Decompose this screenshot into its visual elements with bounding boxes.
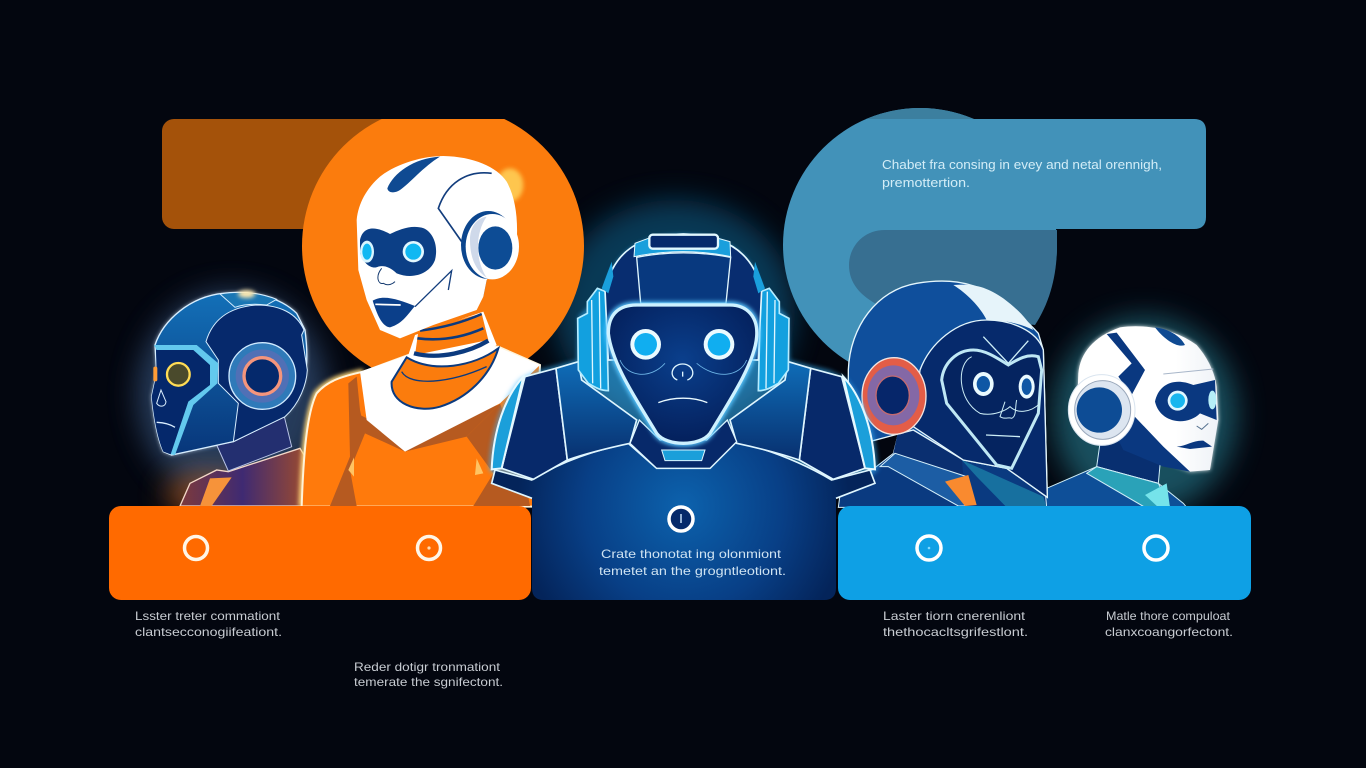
robot: left helmet figure: [152, 290, 307, 506]
helmet side strip right: [753, 262, 765, 293]
scarf inner line: [402, 367, 487, 381]
marker: orange right: [418, 536, 440, 560]
headphone shell: [578, 288, 608, 391]
head flare: [497, 168, 523, 202]
head band: [1107, 333, 1145, 395]
ear outer: [862, 358, 926, 434]
ear salmon ring: [244, 358, 281, 394]
marker: navy centre: [669, 507, 693, 531]
text: caption 2: Reder dotigr tronmationt: [354, 660, 501, 674]
helmet cyan top: [634, 238, 731, 257]
left iris: [362, 244, 372, 260]
left brown panel: [330, 377, 365, 506]
panel: blue base: [838, 506, 1251, 600]
robot: far-right white figure: [1043, 326, 1218, 507]
neck: [1097, 430, 1160, 483]
mouth: [658, 398, 707, 403]
headphone ribs: [766, 292, 775, 388]
teal shoulder: [962, 460, 1047, 507]
darker cap of the blue circle: [866, 108, 974, 119]
right headphone: [758, 288, 789, 391]
ear shade: [470, 217, 487, 278]
teal collar: [1087, 467, 1170, 507]
glow outline: [152, 292, 307, 455]
forehead mark: [387, 157, 440, 192]
text: caption 1: Lsster treter commationt: [135, 609, 281, 623]
neck base: [408, 312, 497, 365]
panel: brown top-left bar: [162, 119, 432, 229]
orange circle backdrop: [302, 119, 584, 368]
right eye: [403, 241, 424, 262]
near eye: [1168, 391, 1188, 411]
face glow: [608, 305, 757, 443]
shoulder cyan strip: [492, 377, 523, 469]
left headphone: [578, 288, 608, 391]
mouth: [373, 298, 415, 327]
chest accent right: [475, 458, 483, 475]
face: [152, 350, 210, 454]
inner darker shape of the blue backdrop: [849, 230, 1057, 325]
shoulder mid plate: [556, 362, 637, 460]
jaw line: [415, 271, 452, 307]
mouth: [1177, 441, 1212, 449]
mouth: [157, 422, 175, 427]
face: [608, 305, 757, 443]
collar band: [880, 453, 967, 506]
lip line: [375, 302, 401, 307]
text: caption 2: [354, 660, 503, 689]
light flare: [238, 290, 255, 298]
panel: blue callout bar: [866, 119, 1206, 229]
forehead mark: [1155, 327, 1185, 346]
robot: centre figure: [488, 234, 878, 600]
far eye: [153, 367, 157, 381]
neck orange: [415, 313, 488, 355]
chest accents: [348, 457, 354, 477]
ear purple: [867, 365, 919, 425]
near eye: [973, 372, 994, 396]
body: [838, 433, 1047, 507]
body glow: [302, 372, 363, 507]
orange neck scarf: [392, 348, 498, 409]
marker: blue left: [917, 536, 941, 560]
cheek lines: [620, 360, 747, 374]
body: [180, 448, 305, 506]
text: caption 2: temerate the sgnifectont.: [354, 675, 503, 689]
ear backing: [461, 211, 516, 279]
text: caption 1: [135, 609, 282, 639]
far iris: [1022, 378, 1032, 395]
brow line: [1163, 369, 1213, 374]
ear inner line: [1075, 381, 1131, 439]
robot: orange figure head: [357, 156, 523, 338]
left eye: [360, 241, 374, 263]
neck stripes: [414, 314, 488, 356]
text: premottertion.: [882, 176, 970, 190]
white highlight: [953, 285, 1033, 330]
headphone ribs: [592, 292, 601, 388]
side plate: [206, 305, 307, 442]
eye socket: [961, 357, 1040, 414]
near iris: [1170, 393, 1185, 408]
chest highlight: [1145, 483, 1170, 507]
helmet slot: [649, 235, 718, 249]
upper brown band: [357, 405, 498, 452]
text: caption 3: [883, 609, 1028, 639]
ear white: [466, 214, 519, 279]
shoulder dark plate: [502, 368, 567, 479]
lower head dark: [1113, 413, 1190, 472]
neck: [893, 427, 963, 477]
text: caption 1: clantsecconogiifeationt.: [135, 625, 282, 639]
torso: [302, 347, 540, 507]
neck cyan piece: [662, 450, 705, 461]
shoulder mid plate: [730, 362, 811, 460]
helmet side strip left: [602, 262, 613, 293]
shoulder dark plate: [799, 368, 865, 479]
nose: [157, 390, 166, 406]
left eye: [630, 329, 661, 360]
torso outline: [492, 442, 875, 498]
panel: orange base: [109, 506, 531, 600]
nose: [1000, 400, 1017, 418]
head: [1077, 326, 1218, 472]
face: [942, 350, 1042, 468]
neck collar: [630, 420, 737, 468]
eye: [167, 363, 190, 386]
background glows: [137, 200, 1237, 517]
collar highlight: [200, 477, 232, 506]
right iris: [708, 333, 730, 356]
ear ring: [1068, 375, 1135, 445]
text: caption 4: Matle thore compuloat: [1106, 609, 1231, 623]
text: navy panel: [599, 547, 786, 578]
panel: navy base: [492, 442, 875, 600]
text: navy panel: temetet an the grogntleotiont.: [599, 564, 786, 578]
right shoulder: [730, 362, 875, 479]
right iris: [405, 244, 421, 260]
eye mask: [1155, 380, 1217, 421]
white collar: [360, 347, 540, 452]
near iris: [977, 376, 990, 392]
text: caption 3: Laster tiorn cnerenliont: [883, 609, 1026, 623]
body: [1043, 467, 1187, 507]
text: navy panel: Crate thonotat ing olonmiont: [601, 547, 782, 561]
marker: orange left: [184, 536, 208, 560]
figure glow: [488, 234, 878, 480]
top highlight: [220, 292, 277, 307]
brow lines: [983, 337, 1028, 363]
neck dark: [467, 275, 487, 307]
helmet centre panel: [637, 253, 731, 303]
ear inner: [236, 349, 289, 403]
ear ring: [229, 343, 296, 409]
helmet: [152, 292, 307, 455]
robot: orange figure body: [302, 312, 540, 507]
text: caption 3: thethocacltsgrifestlont.: [883, 625, 1028, 639]
orange accent: [945, 475, 977, 506]
headphone shell: [758, 288, 789, 391]
right eye: [704, 329, 734, 360]
neck: [217, 417, 292, 471]
nose: [672, 364, 693, 380]
helmet: [605, 234, 762, 360]
head glow: [1077, 326, 1218, 472]
far eye: [1208, 391, 1216, 409]
visor band: [154, 345, 218, 455]
head seam: [438, 173, 492, 242]
mouth: [986, 435, 1020, 437]
left shoulder: [492, 362, 637, 479]
left iris: [634, 333, 657, 356]
robot: right helmet figure: [838, 281, 1047, 507]
dark mask: [913, 320, 1047, 497]
callout text: Chabet fra consing in evey and netal orennigh,: [882, 158, 1162, 172]
nose: [378, 268, 395, 285]
dome: [848, 281, 1047, 497]
blue circle backdrop: [783, 108, 1057, 382]
ear centre: [478, 226, 512, 270]
head: [357, 156, 517, 338]
eye mask: [360, 227, 436, 276]
right brown panel: [467, 403, 530, 506]
text: caption 4: [1105, 609, 1233, 639]
ear centre: [1077, 387, 1122, 433]
far eye: [1019, 375, 1035, 399]
text: caption 4: clanxcoangorfectont.: [1105, 625, 1233, 639]
nose: [1197, 423, 1208, 429]
marker: blue right: [1144, 536, 1168, 560]
shoulder cyan strip: [843, 377, 875, 469]
ear centre: [876, 376, 909, 415]
